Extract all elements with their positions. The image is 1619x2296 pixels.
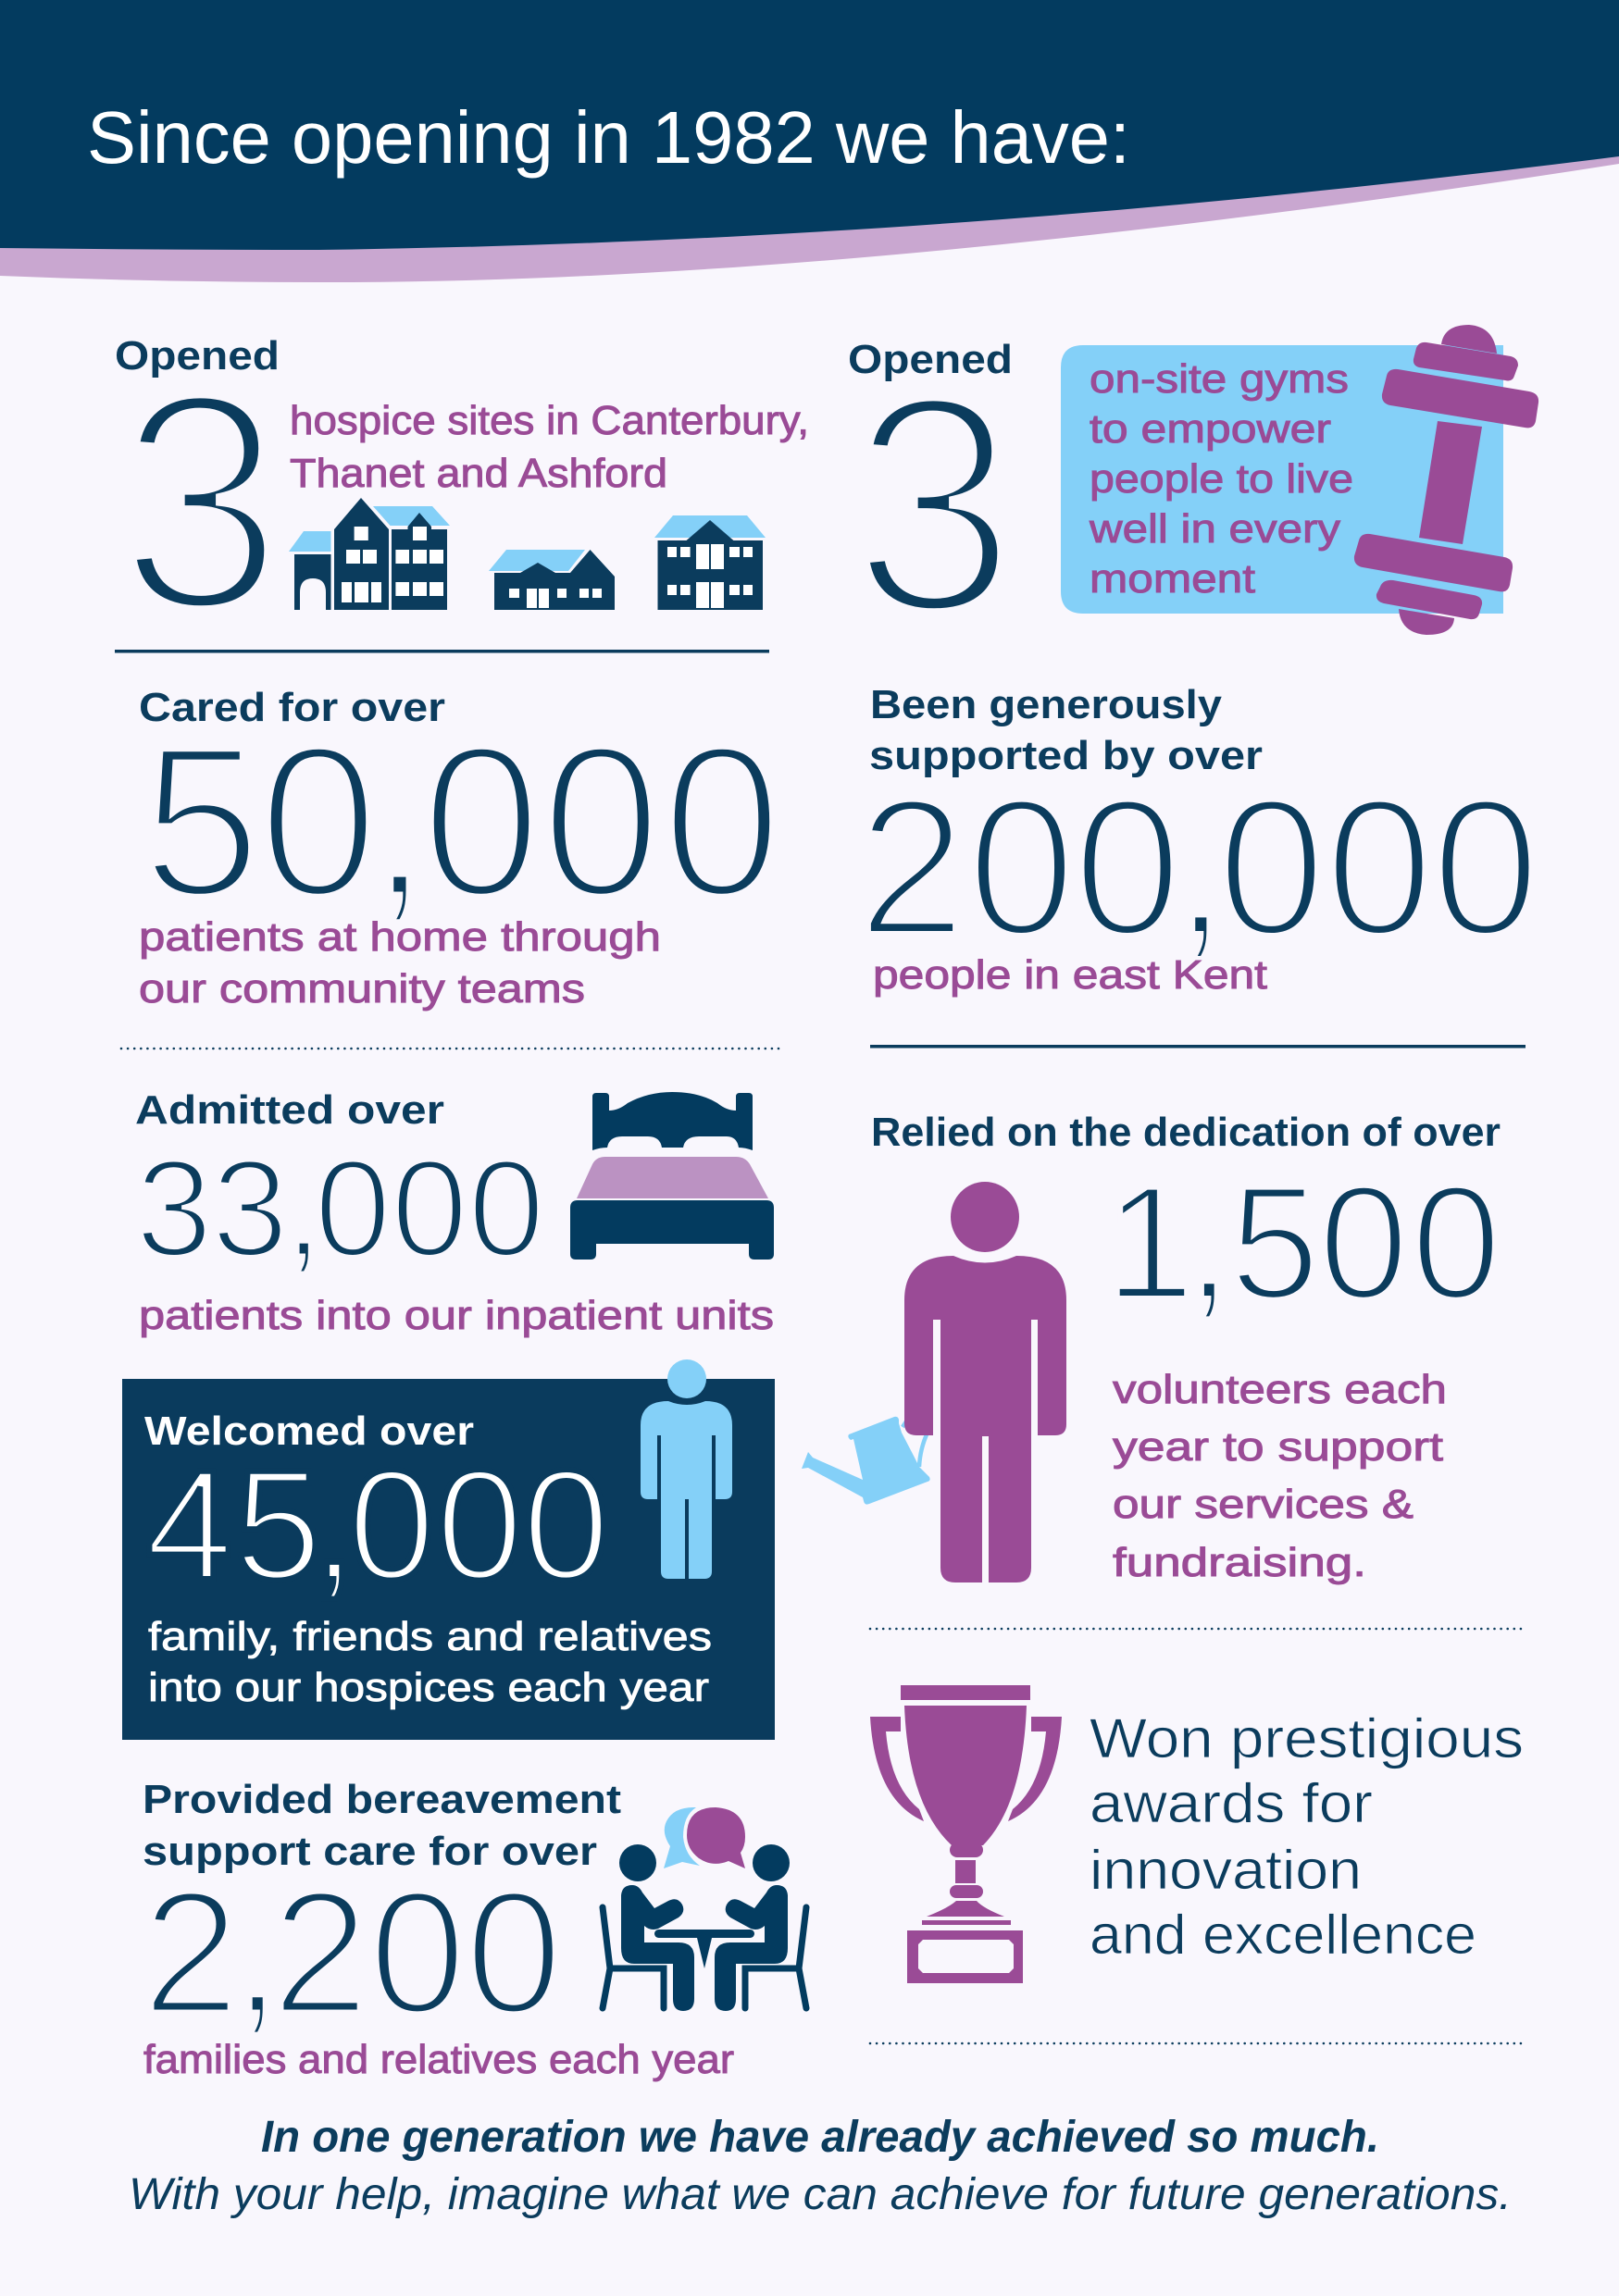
footer closing statement: In one generation we have already achieved so much.	[261, 2113, 1379, 2162]
text: gym description: to empower	[1090, 406, 1331, 452]
panel: on-site gyms	[848, 325, 1538, 678]
number: 33,000: 33,000	[136, 1131, 544, 1285]
text: family friends and relatives	[148, 1614, 712, 1710]
panel: bereavement support	[143, 1777, 806, 2082]
heading: been generously supported	[869, 682, 1263, 778]
icon: dumbbell	[1354, 325, 1538, 635]
panel: awards	[870, 1685, 1524, 1983]
icon: watering can	[802, 1417, 930, 1505]
text: won awards	[1090, 1707, 1524, 1966]
heading: cared for over: Cared for over	[139, 685, 445, 730]
footer closing statement	[129, 2113, 1512, 2219]
text: volunteers description: volunteers each	[1113, 1367, 1447, 1412]
icon: bed	[570, 1092, 774, 1260]
text: gym description: moment	[1090, 556, 1255, 602]
panel: hospice sites	[115, 329, 809, 676]
text: volunteers description: our services &	[1113, 1482, 1414, 1527]
text: gym description	[1089, 356, 1353, 602]
panel: welcomed family	[122, 1359, 775, 1740]
heading: been generously supported: supported by over	[869, 733, 1263, 778]
number: 50,000: 50,000	[142, 701, 782, 942]
text: hospice site names: Thanet and Ashford	[290, 451, 667, 496]
text: family friends and relatives: family, friends and relatives	[148, 1614, 712, 1659]
text: won awards: Won prestigious	[1090, 1707, 1524, 1769]
text: gym description: well in every	[1089, 506, 1340, 552]
text: volunteers description: year to support	[1113, 1424, 1443, 1470]
title: Since opening in 1982 we have:	[87, 96, 1130, 179]
text: gym description: people to live	[1090, 456, 1353, 502]
panel: generously supported	[857, 682, 1540, 998]
icon: large house	[289, 498, 450, 610]
number: 1,500: 1,500	[1104, 1153, 1501, 1334]
heading: provided bereavement support: support care for over	[143, 1829, 597, 1874]
heading: provided bereavement support	[143, 1777, 621, 1874]
panel: volunteers	[802, 1110, 1501, 1585]
number: 45,000: 45,000	[146, 1437, 609, 1612]
text: patients at home: patients at home through	[139, 914, 661, 960]
text: people in east Kent: people in east Kent	[873, 952, 1267, 998]
text: family friends and relatives: into our hospices each year	[148, 1665, 709, 1710]
footer closing statement: With your help, imagine what we can achieve for future generations.	[129, 2170, 1512, 2219]
heading: welcomed over: Welcomed over	[144, 1409, 474, 1454]
icon: tall house	[654, 515, 766, 610]
number: 200,000: 200,000	[857, 758, 1540, 976]
text: won awards: awards for	[1090, 1772, 1373, 1834]
heading: provided bereavement support: Provided bereavement	[143, 1777, 621, 1822]
text: patients at home: our community teams	[139, 966, 585, 1011]
text: won awards: and excellence	[1090, 1904, 1476, 1966]
text: patients into inpatient units: patients into our inpatient units	[139, 1293, 774, 1338]
panel: admitted patients	[135, 1087, 774, 1338]
header banner	[0, 0, 1619, 282]
number: 3 gyms: 3	[852, 331, 1016, 678]
panel: cared for patients	[139, 685, 782, 1011]
text: hospice site names	[290, 398, 809, 496]
heading: been generously supported: Been generously	[870, 682, 1223, 727]
heading: relied on dedication: Relied on the dedication of over	[871, 1110, 1501, 1155]
callout: blue gym box	[1061, 345, 1503, 614]
heading: opened: Opened	[848, 337, 1013, 382]
icon: trophy	[870, 1685, 1062, 1983]
icon: purple person	[904, 1182, 1066, 1582]
number: 2,200: 2,200	[143, 1855, 563, 2051]
icon: small house	[489, 550, 615, 610]
text: volunteers description	[1113, 1367, 1447, 1585]
text: volunteers description: fundraising.	[1113, 1540, 1366, 1585]
heading: opened: Opened	[115, 333, 280, 379]
text: patients at home	[139, 914, 661, 1011]
text: families and relatives: families and relatives each year	[143, 2037, 734, 2082]
number: 3 hospice sites: 3	[118, 329, 283, 676]
text: won awards: innovation	[1090, 1839, 1362, 1901]
text: hospice site names: hospice sites in Canterbury,	[290, 398, 809, 443]
icon: two people talking	[603, 1807, 806, 2011]
text: gym description: on-site gyms	[1090, 356, 1349, 402]
icon: blue person	[641, 1359, 732, 1579]
heading: admitted over: Admitted over	[135, 1087, 444, 1133]
